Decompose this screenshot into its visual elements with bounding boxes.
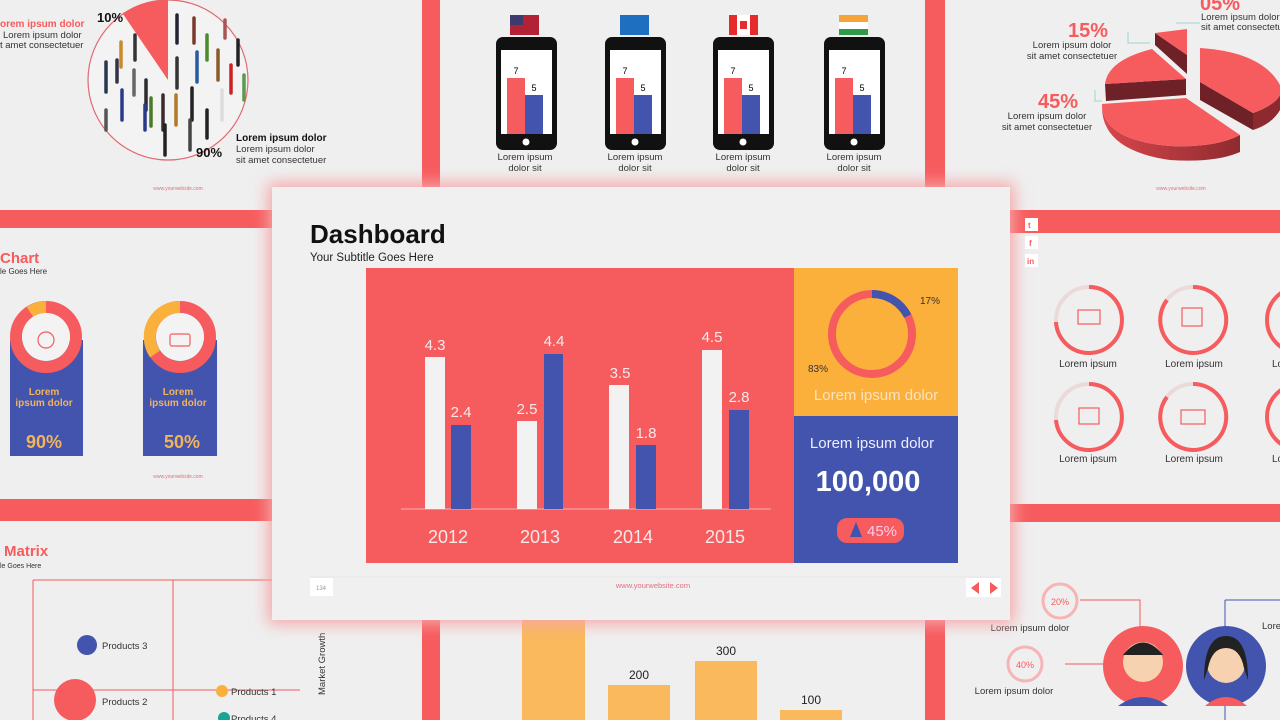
slide: matrix [0,543,328,720]
5% slice [1155,33,1187,74]
slide: orange bars: 100 [801,693,821,707]
slide: org chart [975,584,1280,720]
slide: phones with flags: 5 [748,83,754,93]
donut panel: 17% [920,296,940,307]
slide: phones with flags: Lorem ipsum [716,152,771,163]
slide: phones with flags: 7 [513,66,519,76]
bar chart panel: 2015 [705,527,745,547]
slide: matrix: Products 1 [231,687,276,698]
slide: phones with flags: dolor sit [618,163,652,174]
slide: phones with flags: dolor sit [726,163,760,174]
footer: www.yourwebsite.com [615,581,690,590]
slide: phones with flags: 5 [859,83,865,93]
slide: people pie: sit amet consectetuer [236,155,326,166]
slide: phones with flags: 7 [730,66,736,76]
slide: phones with flags: dolor sit [508,163,542,174]
slide: 3D pie: sit amet consectetuer [1002,122,1092,133]
social icons [1025,218,1038,267]
bar chart panel: 2012 [428,527,468,547]
bar chart panel: 3.5 [610,365,630,382]
bar chart panel: 1.8 [636,425,656,442]
slide: orange bars: 300 [716,644,736,658]
donut panel [794,268,958,416]
bar chart panel: 2013 [520,527,560,547]
slide: donut cards: 90% [26,432,62,452]
slide: icon circles [1056,287,1280,465]
bar chart panel: 2014 [613,527,653,547]
slide: matrix: Products 2 [102,697,147,708]
slide: icon circles: Lorem ipsum [1059,454,1117,465]
slide: donut cards: Lorem [29,387,59,398]
slide: people pie: 90% [196,145,222,160]
slide: orange bars: 200 [629,668,649,682]
slide: org chart: Lorem ipsum dolor [975,686,1053,697]
social icons: f [1029,239,1032,248]
stat panel: Lorem ipsum dolor [810,435,934,452]
bar chart panel: 2.5 [517,401,537,418]
slide: matrix: Matrix [4,543,49,560]
15% slice [1105,79,1186,101]
slide: 3D pie: sit amet consectetuer [1027,51,1117,62]
slide: icon circles: Lorem ipsum [1165,359,1223,370]
stat panel: 45% [867,523,897,540]
slide: phones with flags: 5 [640,83,646,93]
social icons: in [1027,257,1034,266]
slide: matrix: le Goes Here [0,563,41,570]
title: Dashboard [310,219,446,249]
slide: icon circles: Lorem ipsum [1165,454,1223,465]
slide: 3D pie [1002,0,1280,192]
slide: donut cards: ipsum dolor [149,398,207,409]
slide: phones with flags: Lorem ipsum [498,152,553,163]
slide: people pie [0,0,327,192]
slide: 3D pie: www.yourwebsite.com [1156,186,1206,192]
slide: orange bars [522,600,842,720]
slide: phones with flags: Lorem ipsum [827,152,882,163]
right slice [1200,82,1253,130]
slide: phones with flags [496,15,885,174]
bar chart panel [366,268,794,563]
slide: 3D pie: 45% [1038,91,1078,113]
donut panel: Lorem ipsum dolor [814,387,938,404]
slide: donut cards: 50% [164,432,200,452]
slide: phones with flags: 7 [841,66,847,76]
donut panel: 83% [808,364,828,375]
stat panel [794,416,958,563]
card glow [268,183,1014,624]
bar chart panel: 2.4 [451,404,471,421]
slide: 3D pie: Lorem ipsum dolor [1201,12,1280,23]
bottom 45% slice [1102,104,1240,161]
slide: org chart: 20% [1051,597,1069,607]
slide: icon circles: Lorem ipsum [1059,359,1117,370]
bar chart panel: 4.4 [544,333,564,350]
bar chart panel: 4.5 [702,329,722,346]
social icons: t [1028,221,1031,230]
slide: matrix: Products 3 [102,641,147,652]
stat panel: 100,000 [816,466,920,498]
slide: phones with flags: Lorem ipsum [608,152,663,163]
bar chart panel: 4.3 [425,337,445,354]
slide: people pie: Lorem ipsum dolor [236,144,315,155]
slide: phones with flags: 7 [622,66,628,76]
slide: 3D pie: Lorem ipsum dolor [1008,111,1086,122]
bar chart panel: 2.8 [729,389,749,406]
footer [310,577,1001,597]
slide: 3D pie: 15% [1068,20,1108,42]
slide: people pie: Lorem ipsum dolor [3,30,82,41]
slide: donut cards: Lorem [163,387,193,398]
slide: org chart: 40% [1016,660,1034,670]
slide: matrix: Market Growth [317,633,328,695]
slide: 3D pie: Lorem ipsum dolor [1033,40,1111,51]
slide: people pie: orem ipsum dolor [0,19,85,30]
slide: donut cards: www.yourwebsite.com [153,474,203,480]
slide: phones with flags: 5 [531,83,537,93]
slide: phones with flags: dolor sit [837,163,871,174]
slide: people pie: 10% [97,10,123,25]
main dashboard card [272,187,1038,620]
slide: donut cards: le Goes Here [0,267,48,276]
slide: people pie: t amet consectetuer [0,40,83,51]
slide: people pie: www.yourwebsite.com [153,186,203,192]
slide: people pie: Lorem ipsum dolor [236,133,327,144]
slide: donut cards: ipsum dolor [15,398,73,409]
footer: 134 [316,586,327,592]
slide: donut cards [0,250,217,480]
slide: org chart: Lorem ipsum dolor [991,623,1069,634]
slide: donut cards: Chart [0,250,39,267]
subtitle: Your Subtitle Goes Here [310,252,434,264]
